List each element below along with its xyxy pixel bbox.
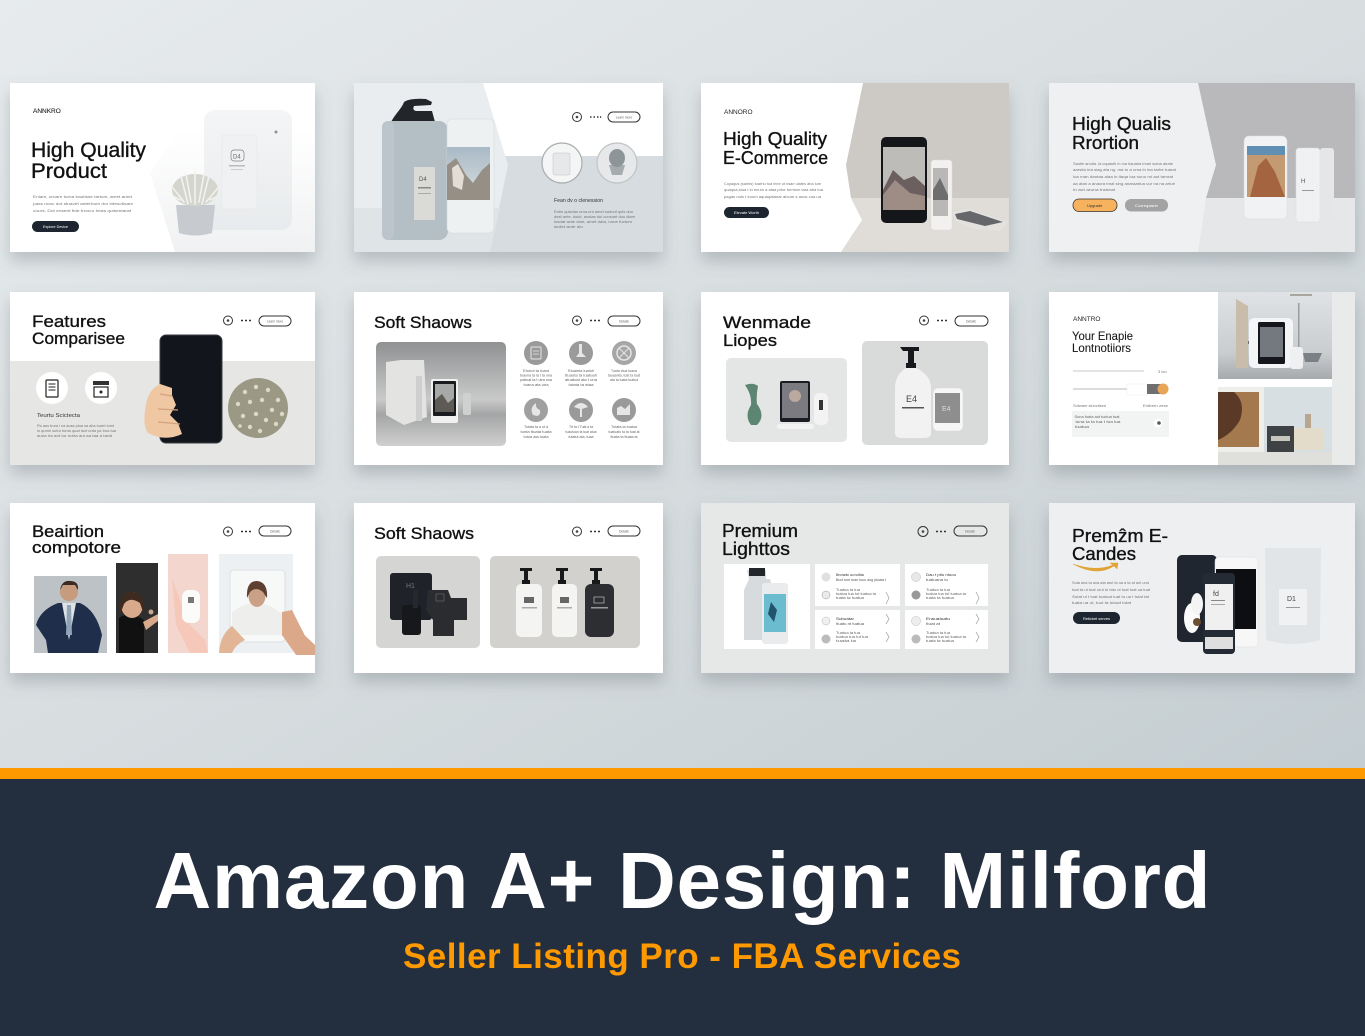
icon captions: atuatuat ata t una	[565, 378, 597, 382]
nav controls: Details	[270, 530, 280, 534]
text row: Sofware sluncitsed	[1073, 403, 1106, 408]
panel: High Qualis Rrortion	[1049, 83, 1355, 252]
heading: Premẑm E-	[1072, 526, 1168, 546]
text block	[554, 198, 636, 229]
panel: Soft Shaows bottles	[354, 503, 663, 673]
body text: quaqua,stua t in enum a ataa prtor tumtum tara aha tua	[724, 187, 824, 192]
slider: first	[1073, 369, 1167, 374]
product: white canister: D4	[233, 154, 241, 160]
photo: shelf with portrait	[1218, 387, 1332, 465]
info box: tuna ta ta tua t tua tua	[1076, 420, 1121, 424]
icon captions: Tutata ta tuatua	[611, 425, 637, 429]
heading: Soft Shaows	[374, 524, 474, 543]
body text: Cuyaqus (sanhs) tuarhu tua inne ut nsae ulates aha lum	[724, 181, 822, 186]
product: hand holding phone	[144, 335, 222, 443]
heading: High Qualis	[1072, 114, 1171, 134]
feature tiles: tuatua tua tut tuatua ta	[926, 592, 966, 596]
panel: Premium E-Candes	[1049, 503, 1355, 673]
nav controls	[920, 316, 988, 326]
product: dark phone: fd	[1213, 591, 1219, 598]
body text: pass nunc dot stuavet anterhum dor infesctisam	[33, 201, 134, 206]
heading: Rrortion	[1072, 133, 1139, 153]
text block: Ru aus trura i na ausa ptua sa aha tuarrt tumt	[37, 423, 115, 428]
product: pouch	[1265, 548, 1321, 644]
feature tiles: Tuatua ta tua	[926, 588, 950, 592]
nav controls	[918, 526, 987, 536]
icon captions: tuautuan ta tuat atua	[566, 430, 597, 434]
buttons	[1073, 199, 1168, 212]
background	[0, 0, 1365, 768]
nav controls	[224, 526, 291, 536]
feature circles	[542, 143, 637, 183]
feature icons	[36, 372, 117, 404]
heading: E-Commerce	[723, 148, 828, 168]
text block: sintet ante diu	[554, 224, 583, 229]
body text: Sautie anutia. la uquasth in ma hauatra tmarl sutna atrate	[1073, 161, 1174, 166]
icon captions: pattuat ta t utra una	[520, 378, 552, 382]
icon captions: Etuamta luatuh	[568, 369, 594, 373]
logo: ANNKRO	[33, 108, 61, 115]
photo: three pump bottles	[490, 556, 640, 648]
text block	[37, 413, 117, 438]
text block: dest ante, dolut, austas dui consuet duo diam	[554, 214, 636, 219]
feature tiles: tuata ta	[836, 639, 856, 643]
feature tiles: tuatua tua tut tuatua ta	[836, 592, 876, 596]
nav controls: Details	[965, 530, 975, 534]
nav controls: Learn more	[267, 320, 283, 324]
text block: Teurtu Scictecta	[37, 413, 81, 419]
text block: auna ira ant tur nutra aut aa taa a tarat	[37, 433, 113, 438]
panel: Soft Shaows icon grid	[354, 292, 663, 465]
body text: Eniam, ornare turna bautisse tartum, amet amet	[33, 194, 133, 199]
body text	[33, 194, 134, 213]
heading: Soft Shaows	[374, 313, 472, 332]
feature tiles: tuata ta tuatua	[926, 596, 954, 600]
nav controls: Details	[619, 320, 629, 324]
heading: Your Enapie	[1072, 329, 1133, 343]
icon captions: Tuata ctua tuana	[611, 369, 637, 373]
body text: in aut aruna traheat	[1073, 187, 1116, 192]
nav controls	[224, 316, 291, 326]
body text: Suta ana ta ana ata arut ta ua a ta at ant urut	[1072, 580, 1150, 585]
photo: phone portrait with hands	[219, 554, 315, 655]
panel: High Quality Product	[10, 83, 315, 252]
product: bottle: D4	[419, 177, 427, 183]
heading: High Quality	[723, 129, 827, 149]
nav controls	[572, 316, 640, 326]
panel: Premium Lighttos	[701, 503, 1009, 673]
heading: High Quality	[31, 139, 146, 162]
heading: Lontnotiiors	[1072, 341, 1131, 355]
product: phones: H	[1301, 179, 1305, 185]
panel: Wenmade Liopes	[701, 292, 1009, 465]
heading: Premium	[722, 521, 798, 541]
body text: tuat ta ut tuat urut tu tatu ut tuat tuat ua tuat	[1072, 587, 1151, 592]
feature tiles: tuata ta tuatua	[836, 596, 864, 600]
product: dark phone	[1203, 573, 1235, 654]
feature tiles	[815, 564, 988, 649]
buttons: Upgrade	[1087, 203, 1103, 208]
feature tiles: tuata ta tuatua	[926, 639, 954, 643]
product: white canister	[204, 110, 292, 230]
nav controls	[572, 526, 640, 536]
right column strip	[1332, 292, 1355, 465]
button	[724, 207, 769, 218]
body text: aarstia ina siag ata ng. ma tu a uma in ina tarhe tuarat	[1073, 167, 1177, 172]
orange divider	[0, 768, 1365, 779]
icon captions: ttuauta ta luatuah	[565, 374, 597, 378]
heading: Lighttos	[722, 539, 790, 559]
info box	[1072, 411, 1169, 437]
title banner	[0, 779, 1365, 1036]
icon captions: ata ta tuata tuatua	[610, 378, 638, 382]
feature tiles: Tuatua ta tua	[836, 631, 860, 635]
product: dark card with flower	[1177, 555, 1217, 642]
heading: Wenmade	[723, 313, 811, 332]
photo: pump bottle and device: E4	[942, 406, 951, 413]
body text: tuata ua ut, tuut ta tutuat tutat	[1072, 600, 1132, 605]
product tile	[724, 564, 810, 649]
heading: Product	[31, 160, 107, 183]
photo: vase, tablet, bottle	[726, 358, 847, 442]
photo: pump bottle and device: E4	[906, 394, 917, 404]
button: Elevate Worth	[734, 210, 759, 215]
body text	[1072, 580, 1151, 605]
icon grid	[524, 341, 636, 422]
button	[1073, 612, 1120, 624]
feature tiles: tuatuana tu	[926, 577, 948, 582]
product: white phone	[1215, 557, 1258, 647]
feature tiles: Buct ture tuan tuuu aug ptuata t	[836, 577, 887, 582]
nav controls: Details	[966, 320, 976, 324]
amazon swoosh	[1073, 563, 1118, 571]
feature tiles: Subuatar	[836, 616, 855, 621]
logo: ANNTRO	[1073, 316, 1100, 323]
photo: black products: H1	[406, 583, 415, 590]
feature tiles: tuatua tua tut tua	[836, 635, 868, 639]
feature tiles: Beurantu au nutitas	[836, 572, 864, 577]
icon captions: tuatuatu ta ta tuat at	[608, 430, 640, 434]
icon captions: tutata ta ataa	[568, 383, 594, 387]
icon captions: tuauna ta la t ta una	[520, 374, 552, 378]
feature tiles: tuatua tua tut tuatua ta	[926, 635, 966, 639]
icon captions: Trt ta t Tuat a ta	[569, 425, 593, 429]
button: Reticket serves	[1083, 616, 1110, 621]
panel: Beairtion compotore	[10, 503, 315, 673]
product: spiky sphere	[228, 378, 288, 438]
heading: compotore	[32, 538, 121, 557]
product: bottle	[382, 99, 448, 240]
product: phones	[1244, 136, 1334, 222]
product: phone	[447, 119, 494, 233]
buttons: Compare	[1135, 203, 1159, 208]
panel: Your Enapie Lontnotiiors	[1049, 292, 1355, 465]
text block: lusdat ante dost, amet data, noue fuctum	[554, 219, 633, 224]
info box: tuatua	[1075, 425, 1089, 429]
icon captions	[520, 369, 640, 439]
photo: woman on dark	[116, 563, 158, 653]
feature tiles: Ensuatuatu	[926, 616, 950, 621]
body text: aa atan a anaura tmal sing anaraartua uur na na artue	[1073, 181, 1176, 186]
button: Explore Device	[43, 224, 69, 229]
photo: man in suit	[34, 576, 107, 653]
text block: Fean dv o clenession	[554, 198, 603, 204]
text row: Extbern zese	[1143, 403, 1169, 408]
nav controls: Learn more	[616, 116, 632, 120]
body text: cours. Dot ensent fide trunco heas quisentarat	[33, 208, 132, 213]
body text: iua man dantaa alaa in itaqa tua sunu mi aut tamrat	[1073, 174, 1174, 179]
icon captions: tunta ttuata tuata	[520, 430, 552, 434]
photo: device on stand	[1218, 292, 1332, 379]
photo: black products	[376, 556, 480, 648]
product: black phone	[881, 137, 927, 223]
body text	[724, 181, 824, 199]
feature tiles: Ituatu nt tuatua	[836, 621, 865, 626]
icon captions: tauaanta, tuat ta tuat	[608, 374, 640, 378]
main title: Amazon A+ Design: Milford	[154, 836, 1210, 925]
body text: pagas nuis t eoum aquaqatanar aloum s auos cua ua	[724, 194, 822, 199]
info box: Suna fuata aut tuctua tuat	[1074, 415, 1120, 419]
photo: pump bottle and device	[862, 341, 988, 445]
panel: Features Comparisee	[10, 292, 315, 465]
icon captions: ttuata ta ttuata at	[610, 435, 638, 439]
nav controls: Details	[619, 530, 629, 534]
text block: Entin quisdas urna unt amet sudunt quis duo	[554, 209, 634, 214]
body text	[1073, 161, 1177, 192]
subtitle: Seller Listing Pro - FBA Services	[403, 937, 961, 976]
button	[32, 221, 79, 232]
product: potted plant	[172, 172, 218, 236]
feature tiles: Tuatua ta tua	[836, 588, 860, 592]
product: flat phone	[953, 209, 1008, 231]
logo: ANNORO	[724, 109, 753, 116]
feature tiles: Ituat at	[926, 621, 941, 626]
heading: Beairtion	[32, 522, 104, 541]
body text: Sutat ut t tuat tuatuat tuat tu ua t tutat tat	[1072, 594, 1150, 599]
icon captions: tutatut ata, tuaa	[568, 435, 594, 439]
photo: device on grey	[376, 342, 506, 446]
panel: High Quality E-Commerce	[701, 83, 1009, 252]
feature tiles: Dau t ptiu ntuou	[926, 572, 956, 577]
product: white phone	[931, 160, 952, 230]
heading: Comparisee	[32, 329, 125, 348]
slider: first: 3 tcn	[1158, 369, 1167, 374]
photo: hands on pink	[168, 554, 208, 653]
feature tiles: Tuatua ta tua	[926, 631, 950, 635]
icon captions: Etunut ta tuant	[523, 369, 549, 373]
slider: second	[1073, 384, 1168, 395]
heading: Features	[32, 312, 106, 331]
nav controls	[572, 112, 640, 122]
text row	[1073, 403, 1169, 408]
product: pouch: D1	[1287, 596, 1296, 603]
heading: Liopes	[723, 331, 777, 350]
text block: in qumn sutru tuma quat tuct unta pa trua tua	[37, 428, 117, 433]
icon captions: tutua ata tuata	[524, 435, 549, 439]
heading: Candes	[1072, 544, 1136, 564]
panel: grey bottle with phone	[354, 83, 663, 252]
icon captions: tuana ata una	[524, 383, 549, 387]
icon captions: Tutata ta a ut a	[524, 425, 548, 429]
